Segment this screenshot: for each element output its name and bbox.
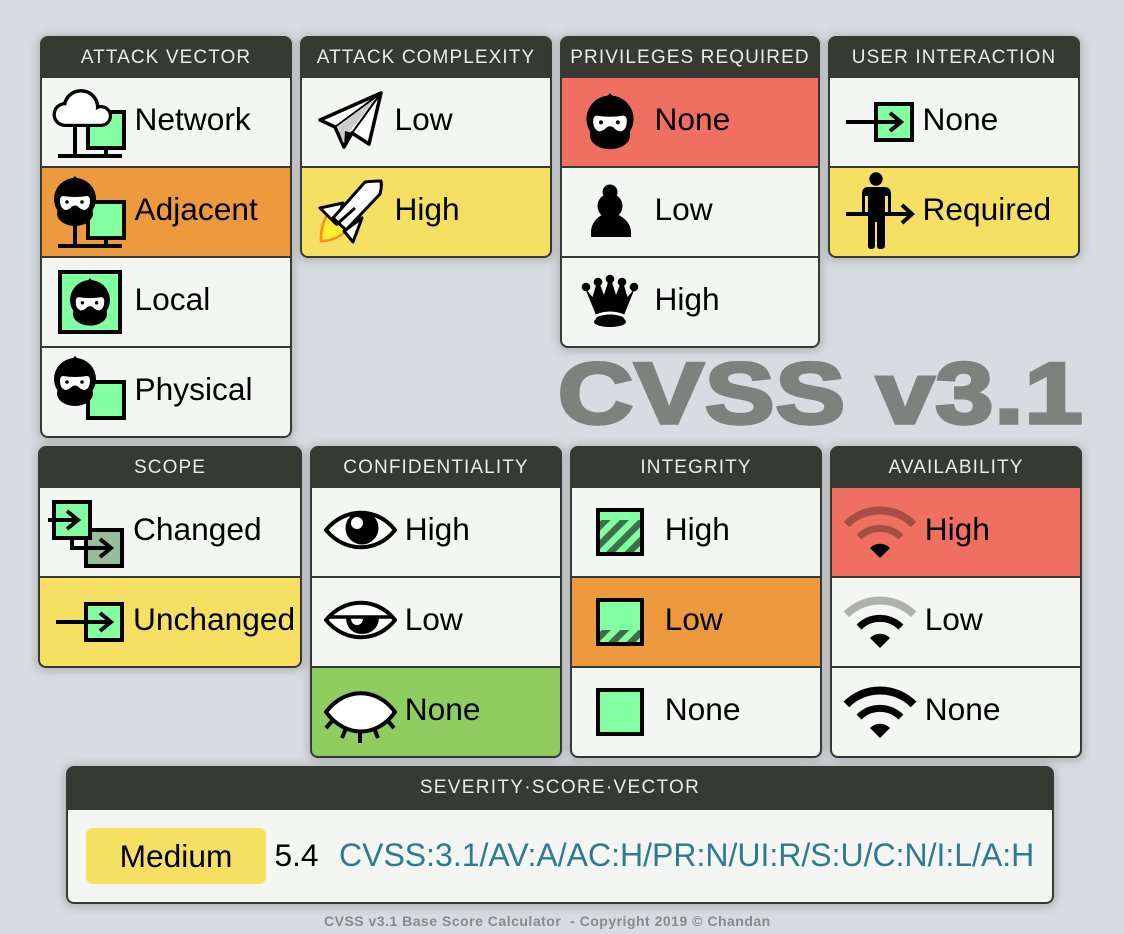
severity badge: medium	[86, 828, 266, 884]
label: low: Low	[654, 191, 713, 227]
heading: confidentiality: CONFIDENTIALITY	[343, 457, 529, 478]
label: none: None	[654, 101, 730, 137]
icon: wifi with faded arcs	[844, 506, 916, 558]
option: high, selected	[832, 488, 1080, 576]
panel: integrity	[570, 446, 822, 758]
label: high: High	[665, 511, 730, 547]
heading: availability: AVAILABILITY	[888, 457, 1024, 478]
heading: privileges required: PRIVILEGES REQUIRED	[570, 47, 810, 68]
option: required, selected	[830, 168, 1078, 256]
option: none, selected	[562, 78, 818, 166]
option: high	[312, 488, 560, 576]
icon: plain square	[596, 688, 644, 736]
score: 5.4	[274, 837, 319, 873]
icon: arrow into square	[56, 602, 124, 642]
icon: person crossed by arrow	[846, 172, 915, 249]
label: low: Low	[665, 601, 723, 637]
results row	[68, 810, 1052, 902]
panel: attack vector	[40, 36, 292, 438]
heading: user interaction: USER INTERACTION	[852, 47, 1056, 68]
icon: rocket	[318, 180, 383, 244]
icon: square slightly hatched	[596, 598, 644, 646]
label: local: Local	[134, 281, 210, 317]
label: high: High	[925, 511, 990, 547]
icon: arrow into square	[846, 102, 914, 142]
icon: wifi with one faded arc	[844, 596, 916, 648]
panel: confidentiality	[310, 446, 562, 758]
option: high, selected	[302, 168, 550, 256]
option: changed	[40, 488, 300, 576]
label: network: Network	[134, 101, 251, 137]
option: none	[572, 668, 820, 756]
title: CVSS v3.1: CVSS v3.1	[558, 346, 1084, 442]
option: low	[302, 78, 550, 166]
label: none: None	[922, 101, 998, 137]
label: physical: Physical	[134, 371, 252, 407]
option: local	[42, 258, 290, 346]
label: high: High	[654, 281, 720, 317]
label: changed: Changed	[133, 511, 262, 547]
label: low: Low	[925, 601, 983, 637]
label: adjacent: Adjacent	[134, 191, 258, 227]
panel: severity score vector	[66, 766, 1054, 904]
option: low	[562, 168, 818, 256]
panel: scope	[38, 446, 302, 668]
panel: availability	[830, 446, 1082, 758]
icon: pawn	[591, 184, 631, 237]
option: none, selected	[312, 668, 560, 756]
heading: scope: SCOPE	[134, 457, 206, 478]
icon: square mostly hatched	[596, 508, 644, 556]
icon: ninja inside square	[58, 270, 122, 334]
heading: severity score vector: SEVERITY·SCORE·VECTOR	[420, 777, 700, 798]
icon: cloud and monitor	[52, 89, 126, 158]
icon: half closed eye	[324, 600, 397, 640]
label: none: None	[405, 691, 480, 727]
option: none	[830, 78, 1078, 166]
label: required: Required	[922, 191, 1051, 227]
icon: ninja	[586, 93, 634, 150]
icon: open eye	[324, 510, 397, 550]
panel: user interaction	[828, 36, 1080, 258]
option: physical	[42, 348, 290, 436]
icon: queen	[582, 274, 638, 327]
label: none: None	[665, 691, 740, 727]
option: low	[832, 578, 1080, 666]
heading: attack vector: ATTACK VECTOR	[81, 47, 251, 68]
icon: arrows through two squares	[48, 500, 124, 568]
panel: attack complexity	[300, 36, 552, 258]
option: low, selected	[572, 578, 820, 666]
icon: ninja touching square	[54, 356, 126, 420]
label: none: None	[925, 691, 1000, 727]
vector string: CVSS:3.1/AV:A/AC:H/PR:N/UI:R/S:U/C:N/I:L/A:H	[339, 837, 1034, 873]
label: high: High	[405, 511, 470, 547]
label: low: Low	[394, 101, 453, 137]
option: unchanged, selected	[40, 578, 300, 666]
icon: closed eye with lashes	[324, 691, 397, 743]
option: none	[832, 668, 1080, 756]
heading: attack complexity: ATTACK COMPLEXITY	[317, 47, 535, 68]
icon: full wifi	[844, 686, 916, 738]
option: high	[562, 258, 818, 346]
heading: integrity: INTEGRITY	[640, 457, 752, 478]
panel: privileges required	[560, 36, 820, 348]
icon: ninja and monitor	[54, 176, 126, 248]
option: high	[572, 488, 820, 576]
icon: paper plane	[318, 91, 383, 149]
label: high: High	[394, 191, 460, 227]
option: low	[312, 578, 560, 666]
footer copyright: CVSS v3.1 Base Score Calculator - Copyright 2019 © Chandan	[324, 913, 771, 929]
severity badge: medium: Medium	[120, 838, 232, 874]
label: low: Low	[405, 601, 463, 637]
option: adjacent, selected	[42, 168, 290, 256]
label: unchanged: Unchanged	[133, 601, 295, 637]
option: network	[42, 78, 290, 166]
